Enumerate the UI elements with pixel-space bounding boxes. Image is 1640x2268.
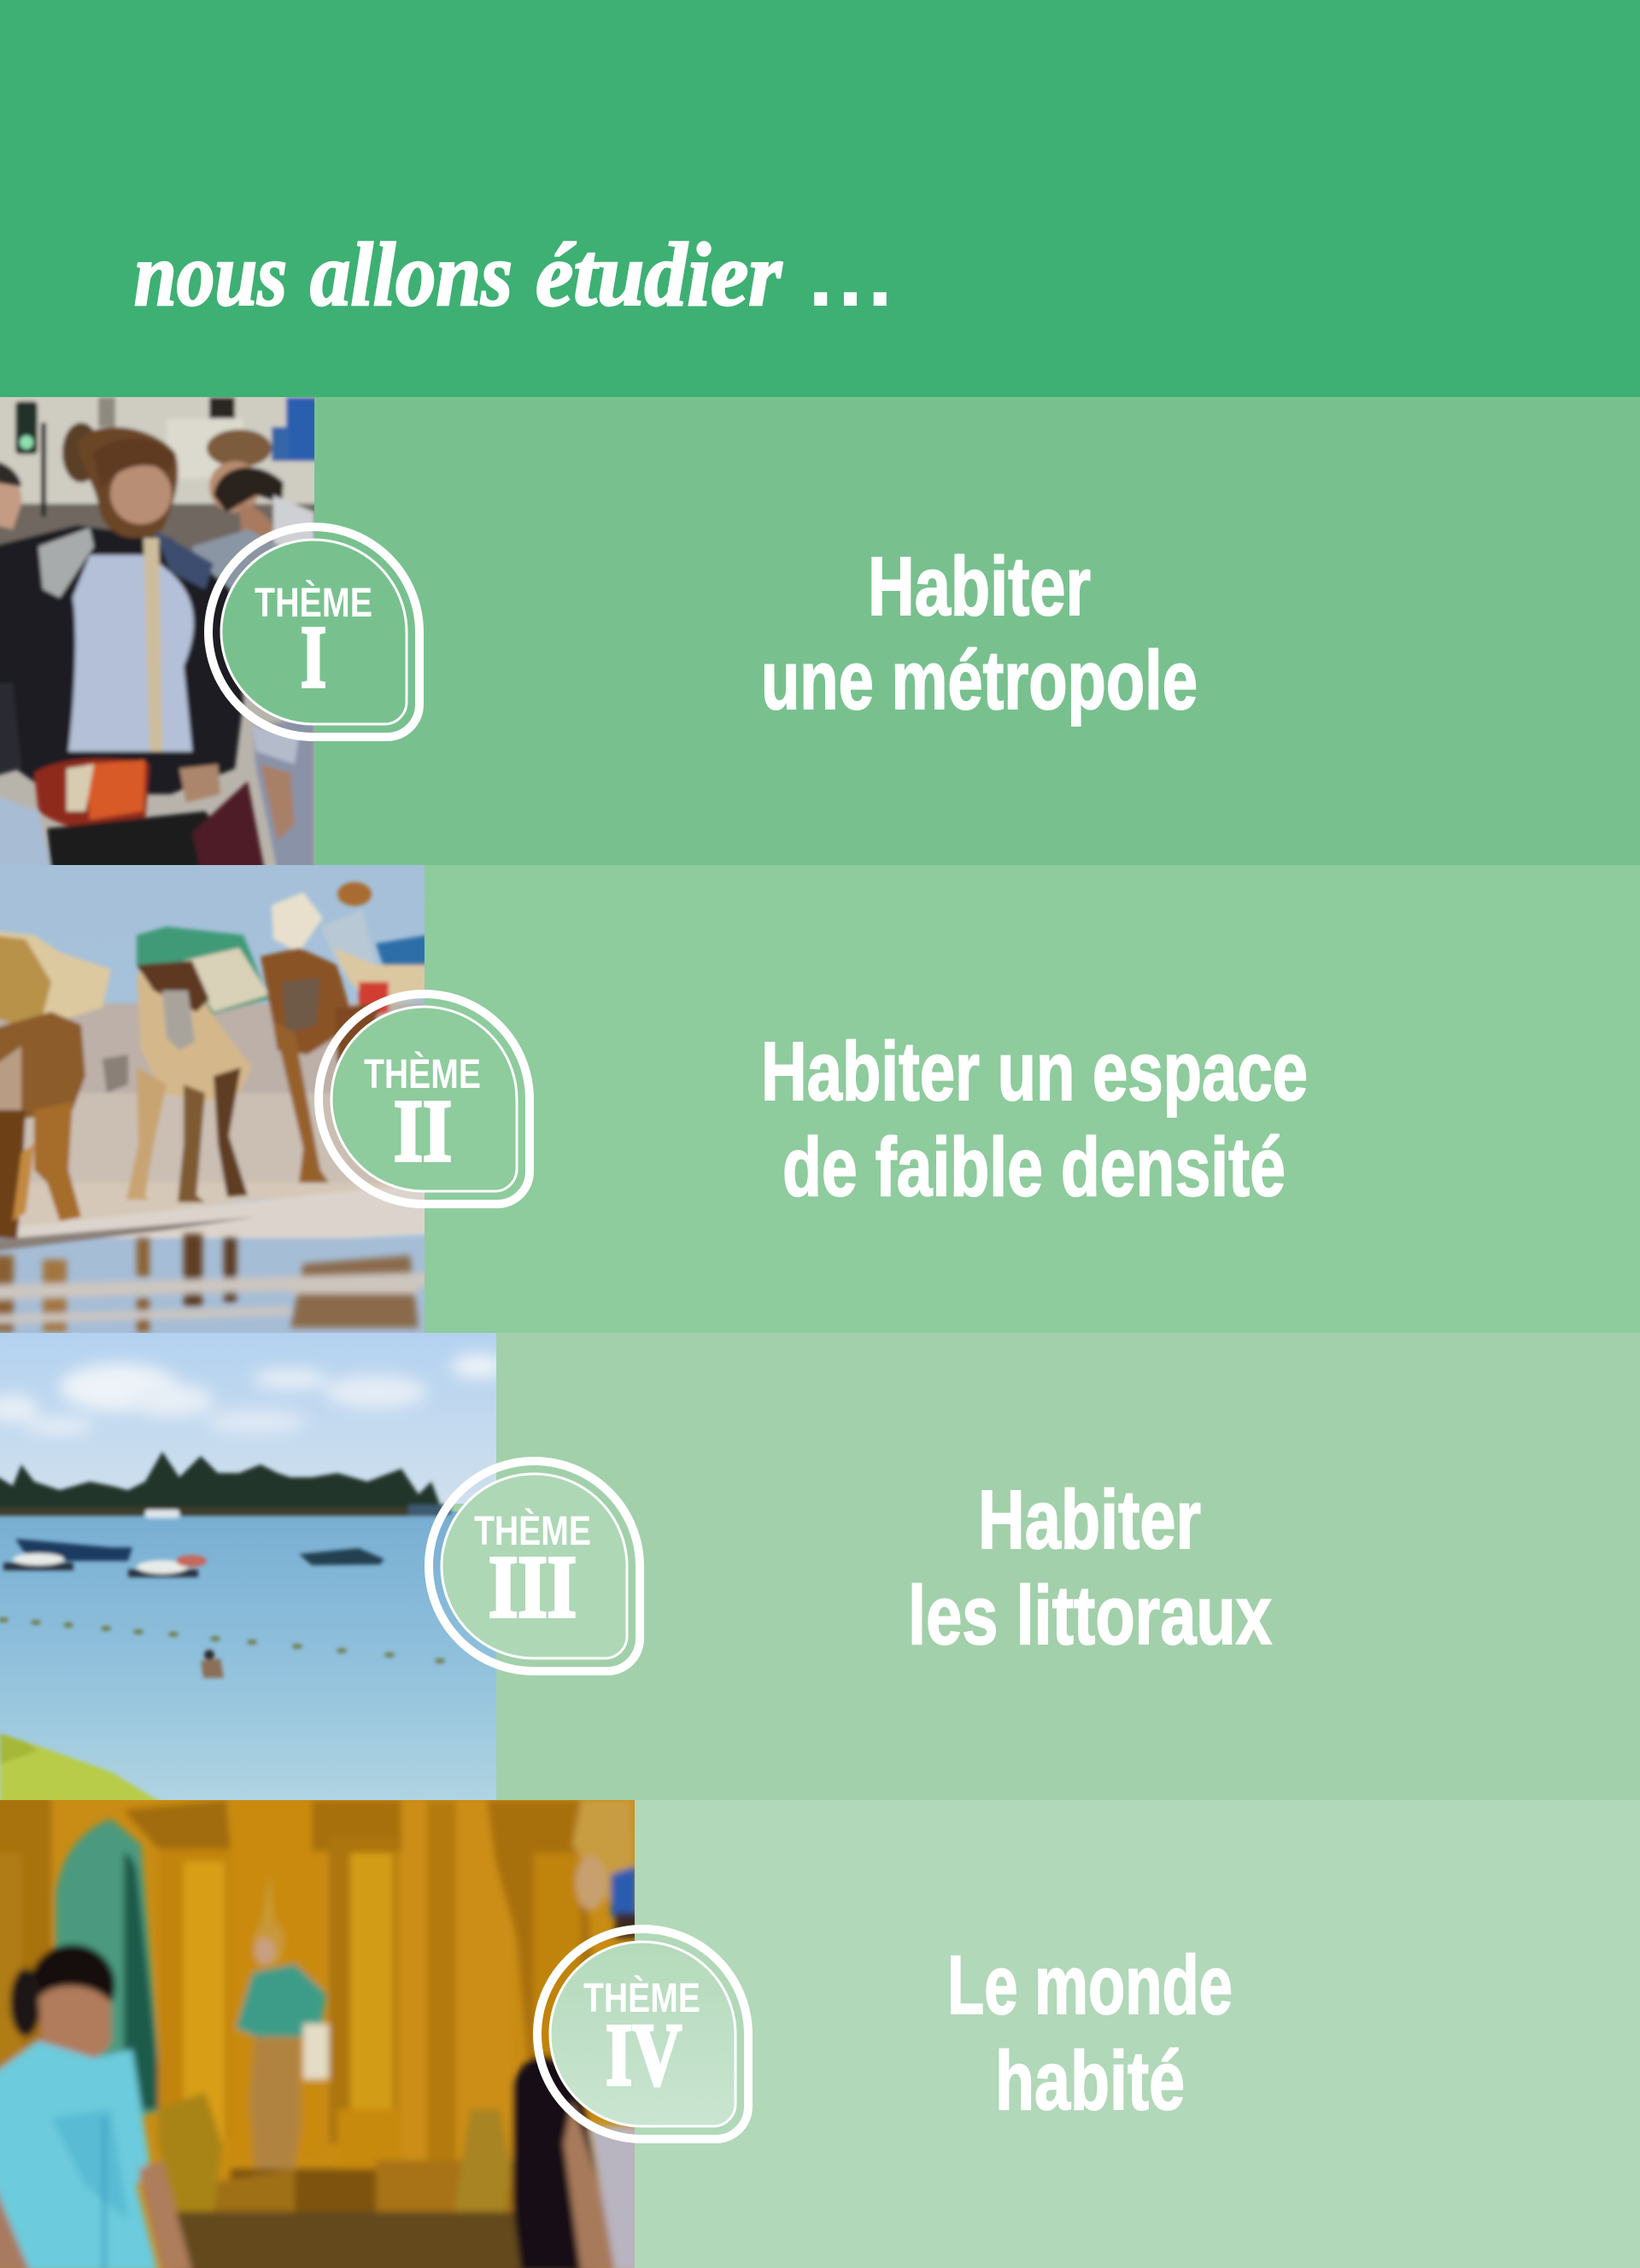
badge: thème I [208,527,419,737]
badge: thème IV [537,1929,748,2139]
heading [947,1938,1233,2127]
heading [761,1025,1308,1213]
heading: une métropole [761,634,1198,727]
label: THÈME [364,1051,481,1097]
heading [761,540,1198,727]
label: THÈME [474,1508,591,1554]
heading: les littoraux [908,1569,1272,1662]
title: ... [810,235,891,322]
photo: camel caravan [0,865,436,1341]
badge: thème III [429,1461,640,1671]
photo: city crowd [0,389,325,871]
heading: Habiter [978,1473,1201,1566]
title: allons [310,225,512,324]
title [134,225,891,324]
panel: theme IV [0,1793,1640,2268]
badge: thème II [319,994,530,1204]
numeral: II [394,1082,452,1180]
heading: Habiter [868,540,1091,633]
numeral: I [301,608,326,706]
header band [0,0,1640,397]
heading [908,1473,1272,1662]
label: THÈME [255,580,372,626]
panel: theme II [0,865,1640,1341]
photo: golden temple [0,1793,641,2268]
heading: Habiter un espace [761,1025,1308,1118]
title: nous [134,225,287,324]
numeral: IV [606,2006,682,2104]
label: THÈME [583,1975,700,2021]
title: étudier [536,225,783,324]
numeral: III [489,1538,577,1636]
heading: de faible densité [782,1120,1286,1213]
heading: Le monde [947,1938,1233,2031]
photo: coastline [0,1333,506,1806]
panel: theme III [0,1333,1640,1806]
heading: habité [995,2034,1185,2127]
panel: theme I [0,389,1640,871]
